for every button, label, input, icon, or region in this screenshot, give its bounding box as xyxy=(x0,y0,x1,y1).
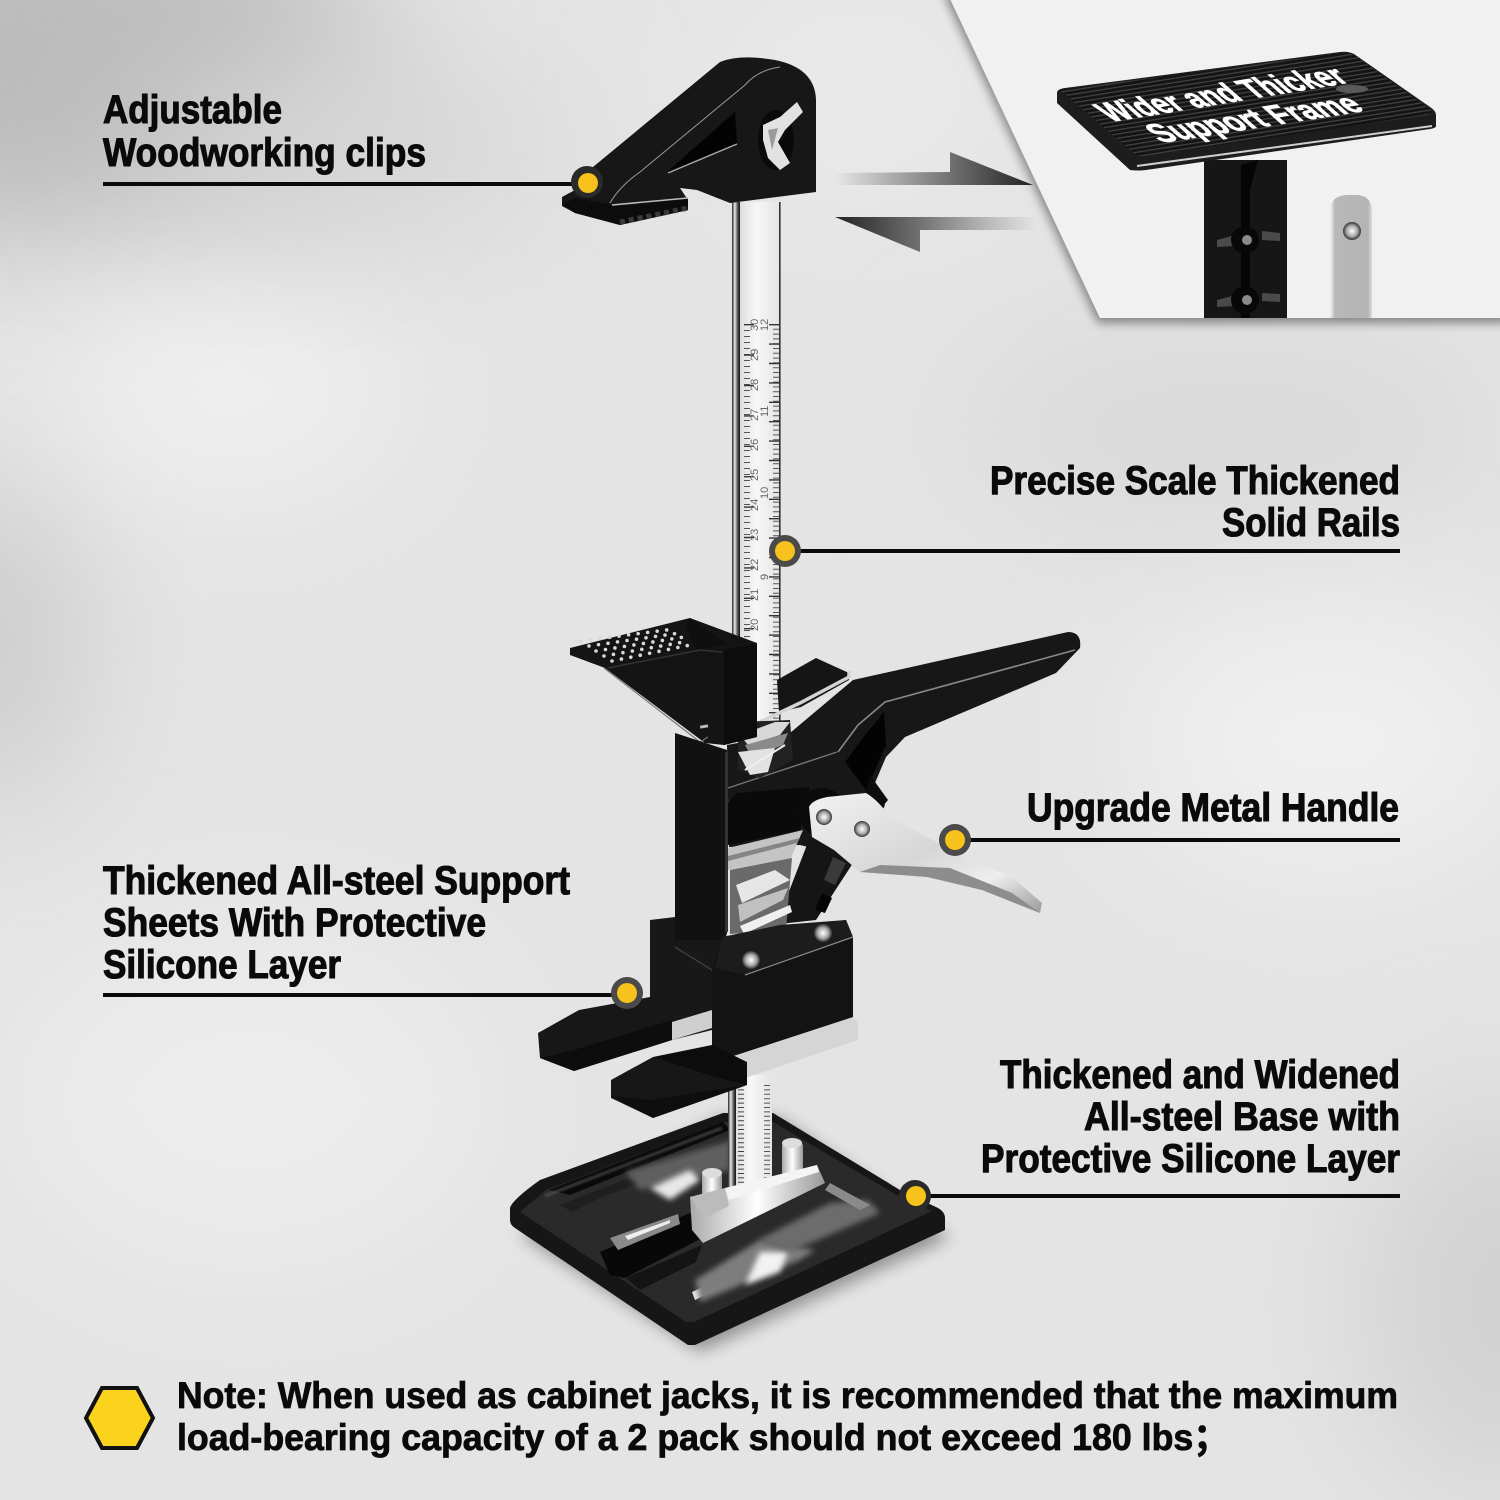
label text: Woodworking clips xyxy=(103,131,426,175)
black handle xyxy=(727,632,1080,860)
leader line xyxy=(103,993,615,997)
marker dot xyxy=(899,1180,931,1212)
scale numbers: 21 xyxy=(749,589,761,601)
wing nut xyxy=(758,102,803,170)
adjustable clip head xyxy=(562,57,816,225)
callout: precise scale rails xyxy=(769,459,1400,567)
label text xyxy=(990,459,1400,545)
front support foot xyxy=(611,1045,747,1118)
lower rail xyxy=(728,1075,772,1190)
inset panel: wider and thicker support frame xyxy=(945,0,1500,318)
scale numbers: 28 xyxy=(749,379,761,391)
scale numbers: 29 xyxy=(749,349,761,361)
scale numbers: 25 xyxy=(749,469,761,481)
inset: silver bar xyxy=(1330,195,1372,318)
leader line xyxy=(103,182,575,186)
scale numbers: 23 xyxy=(749,529,761,541)
scale numbers: 22 xyxy=(749,559,761,571)
label text: Thickened and Widened xyxy=(1000,1053,1400,1097)
upper rail with scale xyxy=(732,202,781,722)
base bolts xyxy=(702,1138,803,1202)
scale numbers: 27 xyxy=(749,409,761,421)
callout: adjustable woodworking clips xyxy=(103,88,603,198)
pad studs xyxy=(581,629,690,661)
silver strip xyxy=(712,1017,858,1078)
arrow: pointing left xyxy=(835,217,1037,252)
label text xyxy=(103,859,570,987)
label text: Sheets With Protective xyxy=(103,901,486,945)
label text: Thickened All-steel Support xyxy=(103,859,570,903)
scale numbers: 26 xyxy=(749,439,761,451)
block top highlight xyxy=(728,752,837,788)
note text: load-bearing capacity of a 2 pack should not exceed 180 lbs； xyxy=(177,1417,1229,1458)
base plate xyxy=(510,1075,950,1352)
main column xyxy=(675,733,727,950)
label text: Protective Silicone Layer xyxy=(981,1137,1400,1181)
centimetre ticks xyxy=(744,324,750,720)
upper spring xyxy=(738,720,793,778)
note text xyxy=(177,1375,1398,1458)
lower block xyxy=(712,920,858,1078)
middle block xyxy=(728,787,810,845)
silver sheets and lower spring xyxy=(728,830,803,934)
arrow: pointing right xyxy=(835,152,1033,185)
marker dot xyxy=(939,824,971,856)
callout: support sheets xyxy=(103,859,643,1009)
marker dot xyxy=(571,166,603,198)
label text xyxy=(981,1053,1400,1181)
upper foot pad and column xyxy=(570,618,757,745)
inset: ribbed plate with text xyxy=(1057,52,1436,170)
inset text: line 1: Wider and Thicker xyxy=(1087,61,1357,128)
handle slot xyxy=(845,712,886,790)
left support foot xyxy=(538,917,728,1071)
block screws xyxy=(742,924,832,969)
scale numbers: 9 xyxy=(759,574,771,580)
scale numbers: 20 xyxy=(749,619,761,631)
label text: Solid Rails xyxy=(1222,501,1400,545)
inset text: line 2: Support Frame xyxy=(1137,89,1372,149)
scale numbers: 24 xyxy=(749,499,761,511)
base bracket xyxy=(690,1165,825,1243)
jack product illustration xyxy=(510,57,1080,1352)
base slot highlights xyxy=(610,1183,880,1302)
leader line xyxy=(795,549,1400,553)
black link with holes xyxy=(770,837,853,925)
scale numbers: 11 xyxy=(759,406,771,417)
silver lever edge xyxy=(760,671,849,722)
scale numbers xyxy=(749,319,771,631)
label text xyxy=(103,88,426,175)
note text: Note: When used as cabinet jacks, it is recommended that the maximum xyxy=(177,1375,1398,1416)
callout: all-steel base xyxy=(899,1053,1400,1212)
label text: Adjustable xyxy=(103,88,282,132)
label text: Precise Scale Thickened xyxy=(990,459,1400,503)
lever tab xyxy=(777,658,849,712)
inset: support stem xyxy=(1204,160,1287,318)
inch ticks xyxy=(773,324,779,720)
leader line xyxy=(965,838,1400,842)
icon: yellow hexagon xyxy=(86,1388,153,1448)
handle highlight xyxy=(838,650,1075,752)
column edge xyxy=(725,752,728,932)
silver handle xyxy=(798,775,1042,913)
scale numbers: 10 xyxy=(759,487,771,499)
marker dot xyxy=(769,535,801,567)
label text: Silicone Layer xyxy=(103,943,341,987)
marker dot xyxy=(611,977,643,1009)
callout: upgrade metal handle xyxy=(939,786,1400,856)
scale numbers: 30 xyxy=(749,319,761,331)
leader line xyxy=(925,1194,1400,1198)
scale numbers: 12 xyxy=(759,319,771,331)
label text: All-steel Base with xyxy=(1084,1095,1400,1139)
note xyxy=(86,1375,1398,1458)
label text: Upgrade Metal Handle xyxy=(1027,786,1399,830)
inset background xyxy=(945,0,1500,318)
